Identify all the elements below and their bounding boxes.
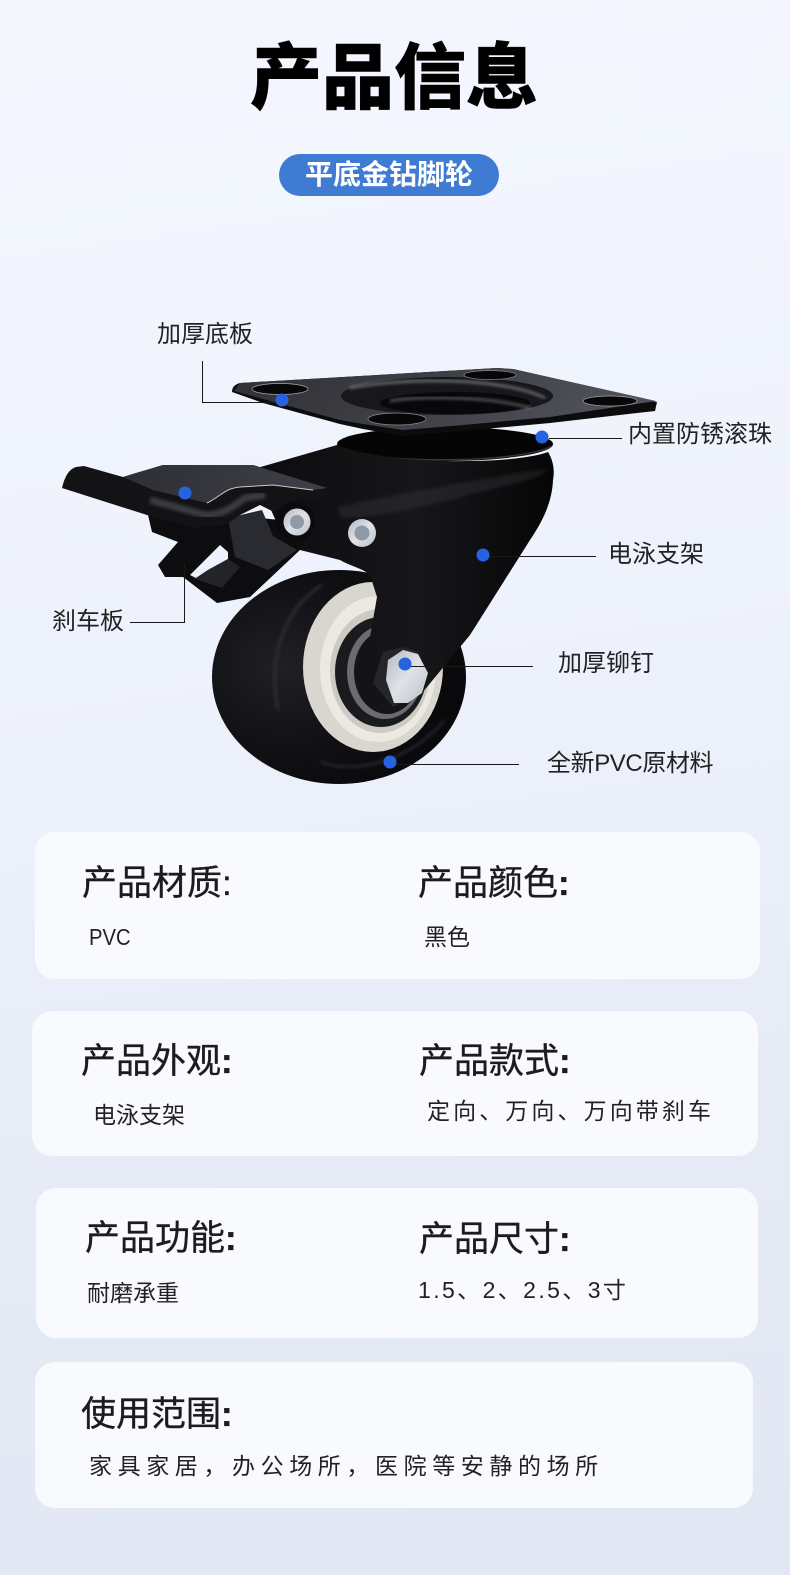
pivot rivets	[275, 502, 376, 547]
panel: usage scope	[35, 1362, 753, 1508]
heading: 产品颜色: 产品颜色:	[418, 864, 570, 903]
subtitle pill: 平底金钻脚轮	[305, 159, 473, 190]
value: 耐磨承重: 耐磨承重	[87, 1280, 179, 1306]
marker dots	[178, 394, 548, 768]
value: PVC: PVC	[89, 924, 131, 950]
label: 电泳支架: 电泳支架	[608, 541, 704, 568]
heading: 产品款式: 产品款式:	[419, 1042, 571, 1081]
label: 加厚铆钉: 加厚铆钉	[558, 650, 654, 677]
heading: 使用范围: 使用范围:	[81, 1395, 233, 1434]
label: 加厚底板: 加厚底板	[157, 321, 253, 348]
value: sizes: 1.5、2、2.5、3寸	[418, 1277, 628, 1303]
leader lines	[130, 361, 622, 764]
label: 全新PVC原材料: 全新PVC原材料	[547, 750, 713, 777]
title: 产品信息	[250, 39, 538, 119]
label: 内置防锈滚珠: 内置防锈滚珠	[628, 421, 772, 448]
value: 定向、万向、万向带刹车: 定向、万向、万向带刹车	[427, 1098, 714, 1124]
heading: 产品尺寸: 产品尺寸:	[419, 1220, 571, 1259]
heading: 产品材质: 产品材质:	[82, 864, 232, 903]
panel: function and size	[36, 1188, 758, 1338]
bracket	[250, 445, 554, 693]
heading: 产品功能: 产品功能:	[85, 1219, 237, 1258]
product illustration: caster wheel	[62, 361, 657, 784]
subtitle pill	[279, 154, 499, 196]
brake mechanism	[62, 465, 327, 603]
panel: material and colour	[35, 832, 760, 979]
wheel	[212, 570, 466, 784]
panel: appearance and style	[32, 1011, 758, 1156]
top mounting plate	[232, 368, 657, 436]
heading: 产品外观: 产品外观:	[81, 1042, 233, 1081]
label: 刹车板: 刹车板	[52, 608, 124, 635]
swivel collar	[337, 427, 553, 461]
hex bolt	[373, 647, 428, 707]
value: 电泳支架: 电泳支架	[93, 1102, 185, 1128]
bracket highlight	[337, 470, 547, 518]
value: 黑色: 黑色	[424, 924, 470, 950]
value: usage places: 家具家居，办公场所，医院等安静的场所	[89, 1453, 604, 1479]
